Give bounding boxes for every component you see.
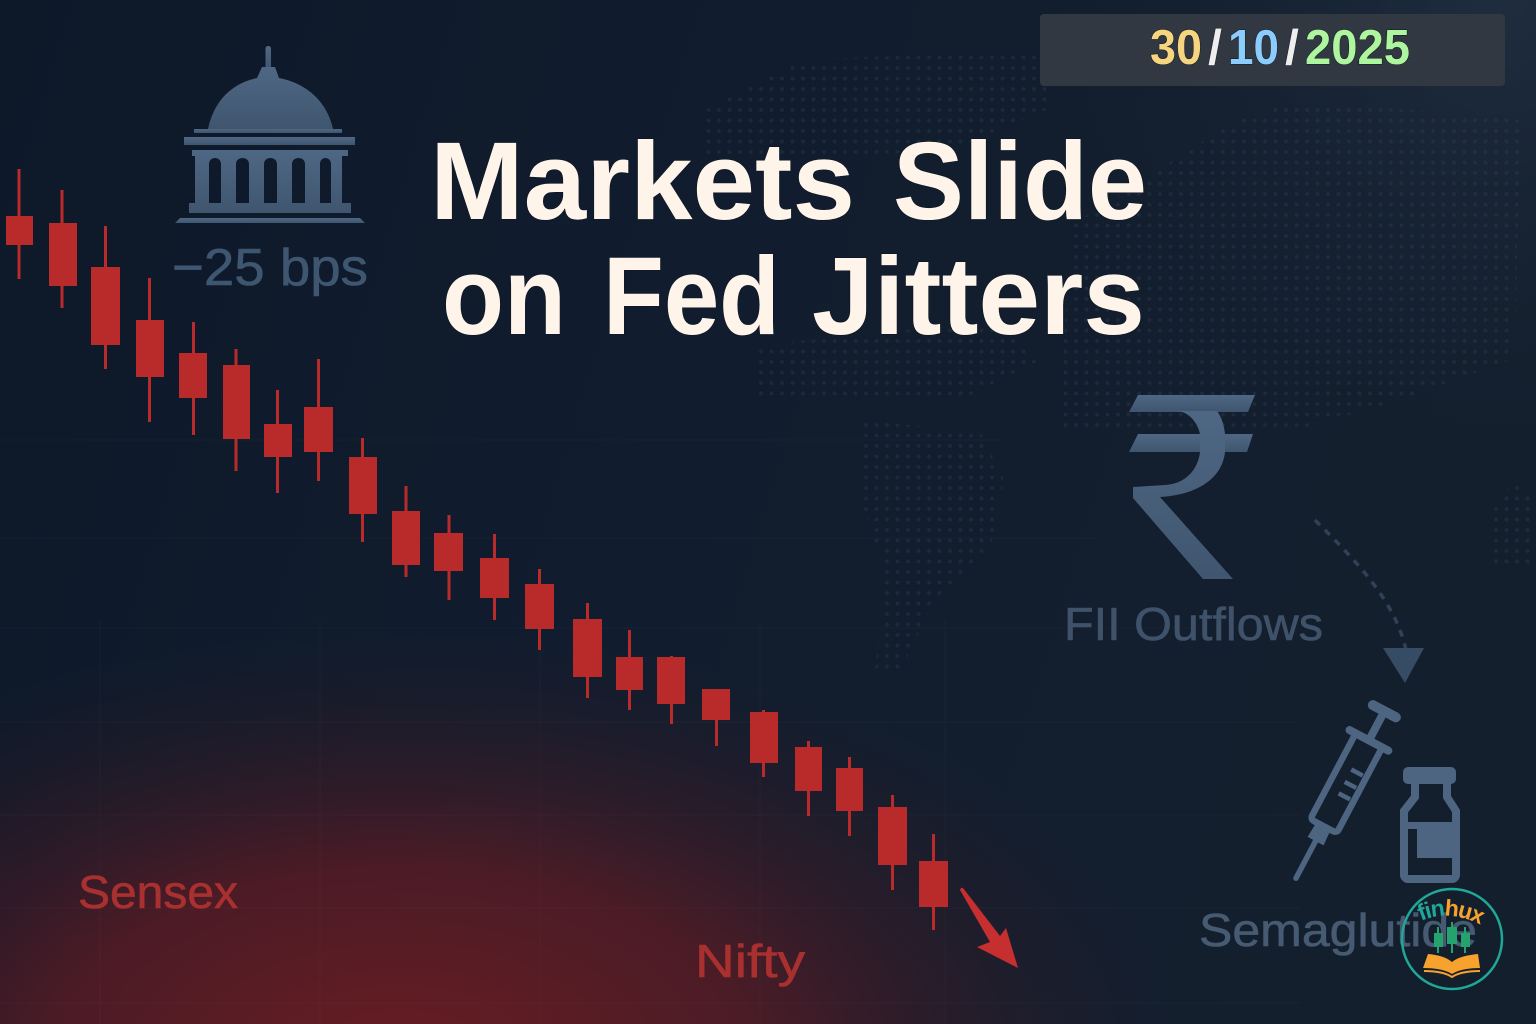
date text: 2025 [1305,21,1410,75]
arrow: red downward [960,888,1018,968]
date text: / [1285,21,1299,75]
label: minus 25 bps: −25 bps [172,239,368,297]
label: Semaglutide: Semaglutide [1199,904,1477,956]
label: FII Outflows: FII Outflows [1064,598,1323,650]
date text: 10 [1228,21,1279,75]
label: Nifty: Nifty [695,935,805,987]
title: on [442,235,566,358]
title [430,120,1147,358]
candlestick chart [6,169,948,930]
date text: 30 [1150,21,1202,75]
icon: vial [1403,767,1456,879]
icon: rupee symbol [1129,395,1255,579]
logo: finhux: finhux [1417,898,1485,924]
icon: central bank building [175,46,365,223]
date badge [1040,14,1505,86]
title: Markets [430,120,855,243]
icon: syringe [1276,701,1404,889]
dotted world map [706,56,1530,668]
title: Slide [893,120,1147,243]
title: Fed [603,235,780,358]
date text: / [1208,21,1222,75]
label: Sensex: Sensex [78,866,238,918]
logo: finhux [1400,888,1504,990]
arrow: dashed curved [1315,520,1424,683]
date text [1150,21,1410,75]
title: Jitters [812,235,1145,358]
